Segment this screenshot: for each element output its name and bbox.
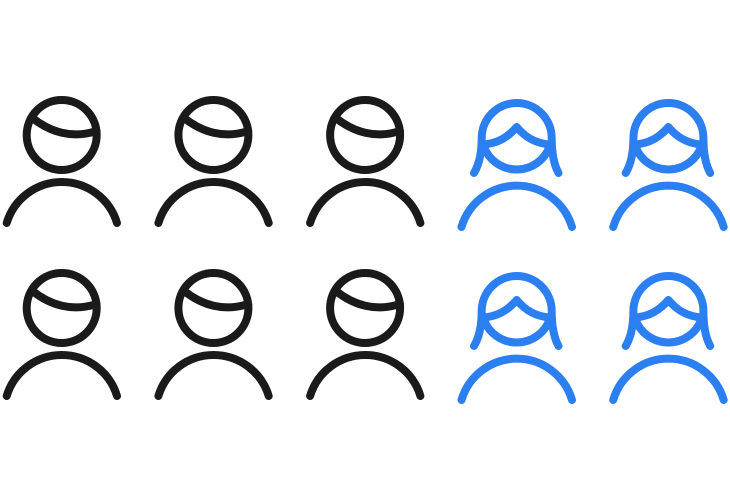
icon: woman, row 1 column 5 — [613, 103, 724, 227]
icon: man, row 1 column 2 — [158, 100, 269, 223]
icon: man, row 2 column 1 — [7, 273, 117, 396]
icon: man, row 1 column 3 — [310, 100, 420, 223]
icon: man, row 2 column 3 — [310, 273, 420, 396]
icon: woman, row 2 column 5 — [613, 276, 724, 400]
icon: man, row 2 column 2 — [158, 273, 269, 396]
icon: woman, row 2 column 4 — [462, 276, 572, 400]
icon: woman, row 1 column 4 — [462, 103, 572, 227]
icon: man, row 1 column 1 — [7, 100, 117, 223]
